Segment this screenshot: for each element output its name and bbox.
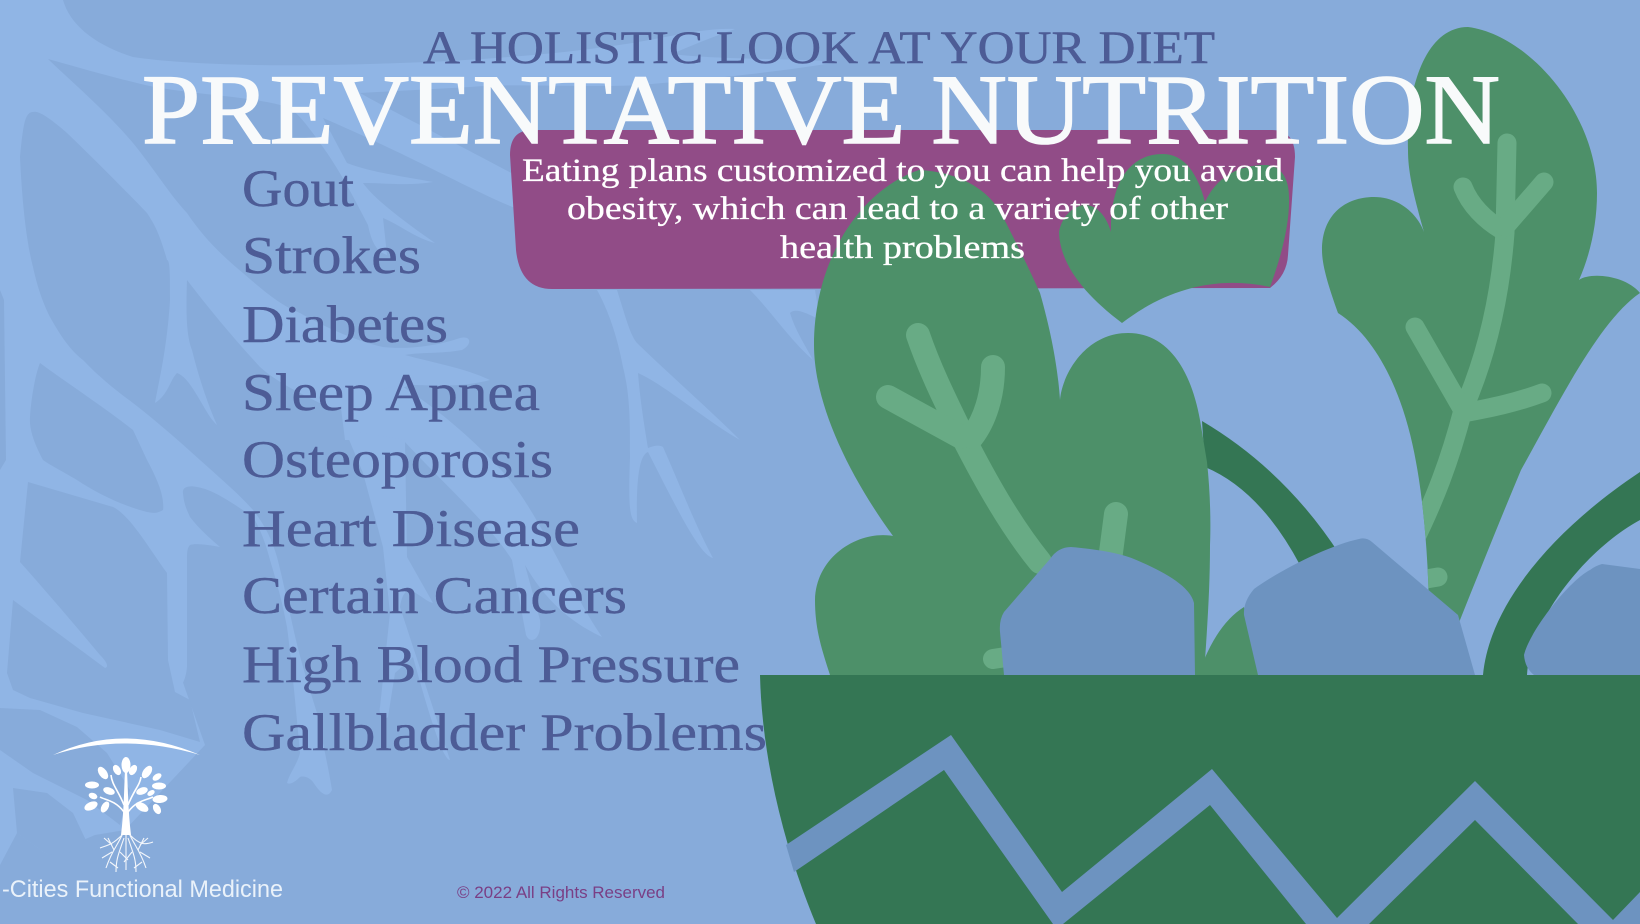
logo: practice name: -Cities Functional Medicine xyxy=(2,876,283,903)
logo: tree emblem xyxy=(53,738,200,872)
heading: eyebrow: A HOLISTIC LOOK AT YOUR DIET xyxy=(423,22,1215,74)
list of conditions: Sleep Apnea xyxy=(242,364,540,422)
illustration: dark green stems xyxy=(1202,421,1640,675)
leaf veins: left leaf xyxy=(888,335,1116,659)
list of conditions: High Blood Pressure xyxy=(242,636,740,694)
illustration: blue shapes in bowl xyxy=(1000,538,1640,675)
list of conditions: Strokes xyxy=(242,227,421,285)
list of conditions: Diabetes xyxy=(242,296,448,354)
leaf veins: right leaf xyxy=(1410,143,1544,580)
illustration: small centre leaf xyxy=(1196,607,1262,675)
list of conditions: Certain Cancers xyxy=(242,567,627,625)
heading: title: PREVENTATIVE NUTRITION xyxy=(142,54,1500,165)
list of conditions: Gout xyxy=(242,160,354,218)
callout text xyxy=(522,153,1284,266)
callout text: obesity, which can lead to a variety of other xyxy=(567,191,1228,227)
illustration: left leaf xyxy=(814,170,1210,675)
list of conditions: Gallbladder Problems xyxy=(242,704,767,762)
illustration: right leaf xyxy=(1322,27,1640,640)
background: darker cells between branches xyxy=(0,290,200,870)
list of conditions xyxy=(242,160,767,762)
list of conditions: Osteoporosis xyxy=(242,431,553,489)
list of conditions: Heart Disease xyxy=(242,500,580,558)
illustration: heart leaf xyxy=(1059,154,1289,323)
illustration: bowl xyxy=(760,675,1640,924)
background: pale tree branches xyxy=(0,0,838,865)
callout text: health problems xyxy=(780,230,1025,266)
copyright: © 2022 All Rights Reserved xyxy=(457,883,665,902)
callout text: Eating plans customized to you can help you avoid xyxy=(522,153,1284,189)
bowl zigzag band xyxy=(786,735,1640,924)
callout panel backing xyxy=(510,130,1295,289)
